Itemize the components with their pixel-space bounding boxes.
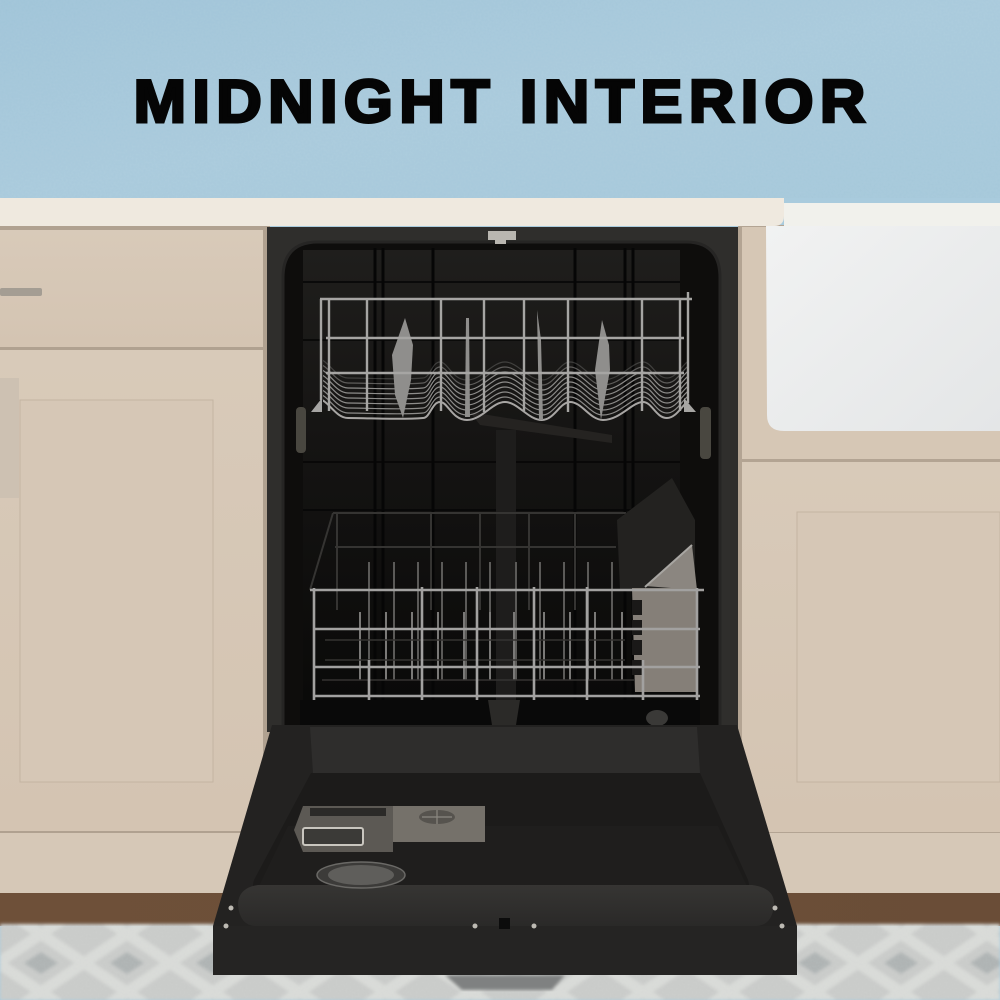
drawer handle (0, 288, 42, 296)
door back ridge (310, 727, 700, 773)
cabinet door right (742, 462, 1000, 832)
rack wave tines (318, 358, 694, 420)
side rail clips (296, 407, 711, 459)
dividers (392, 310, 610, 420)
door liner (213, 725, 797, 926)
door filter cap (317, 862, 405, 888)
cabinet drawer (0, 230, 263, 347)
rack frame wires (310, 587, 704, 702)
cutlery basket (617, 478, 697, 692)
dishwasher tub (267, 227, 738, 740)
farmhouse sink (766, 226, 1000, 431)
lower dish rack (310, 478, 704, 702)
door front panel (213, 926, 797, 975)
wall background (0, 0, 1000, 198)
back wires (310, 513, 626, 610)
tines (322, 562, 635, 680)
rack rollers (311, 398, 696, 412)
title: MIDNIGHT INTERIOR (134, 68, 865, 136)
tub wall panels (303, 248, 680, 725)
door floor (253, 773, 749, 892)
left cabinets (0, 198, 270, 838)
wood floor (0, 893, 1000, 926)
hinge latch (488, 231, 516, 244)
hinge screws (224, 906, 784, 928)
right cabinets (738, 225, 1000, 835)
detergent dispenser (294, 806, 485, 852)
patterned rug (0, 924, 1000, 1000)
open dishwasher door (213, 725, 797, 975)
sump area (300, 700, 700, 730)
door latch (499, 918, 510, 929)
cabinet door (0, 350, 263, 831)
countertop (0, 198, 1000, 226)
spray arm column (470, 412, 612, 700)
front lip (238, 885, 774, 926)
rack frame wires (320, 292, 692, 412)
baseboard (0, 833, 1000, 893)
upper dish rack (311, 292, 696, 420)
shadow under door (445, 975, 565, 990)
